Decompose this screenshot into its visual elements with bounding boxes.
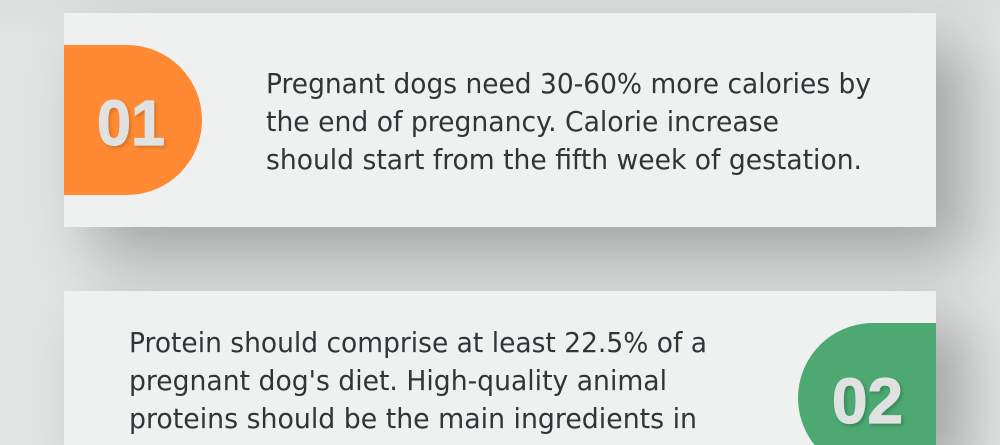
badge: 01: 01 xyxy=(99,89,167,161)
text: calorie needs: Pregnant dogs need 30-60% more calories by xyxy=(266,68,871,100)
text: calorie needs: should start from the fifth week of gestation. xyxy=(266,144,862,176)
panel: card 02 xyxy=(64,291,936,445)
badge: 02: 02 xyxy=(832,365,903,437)
badge: 02: 02 xyxy=(834,367,905,439)
badge: 02 xyxy=(798,323,936,445)
badge: 01: 01 xyxy=(97,87,165,159)
text: calorie needs xyxy=(266,68,871,176)
text: calorie needs: the end of pregnancy. Calorie increase xyxy=(266,106,779,138)
panel: card 01 xyxy=(64,13,936,227)
text: protein needs: proteins should be the main ingredients in xyxy=(129,403,697,435)
text: protein needs: pregnant dog's diet. High-quality animal xyxy=(129,365,667,397)
text: protein needs xyxy=(129,327,707,435)
badge: 01 xyxy=(64,45,202,195)
text: protein needs: Protein should comprise at least 22.5% of a xyxy=(129,327,707,359)
